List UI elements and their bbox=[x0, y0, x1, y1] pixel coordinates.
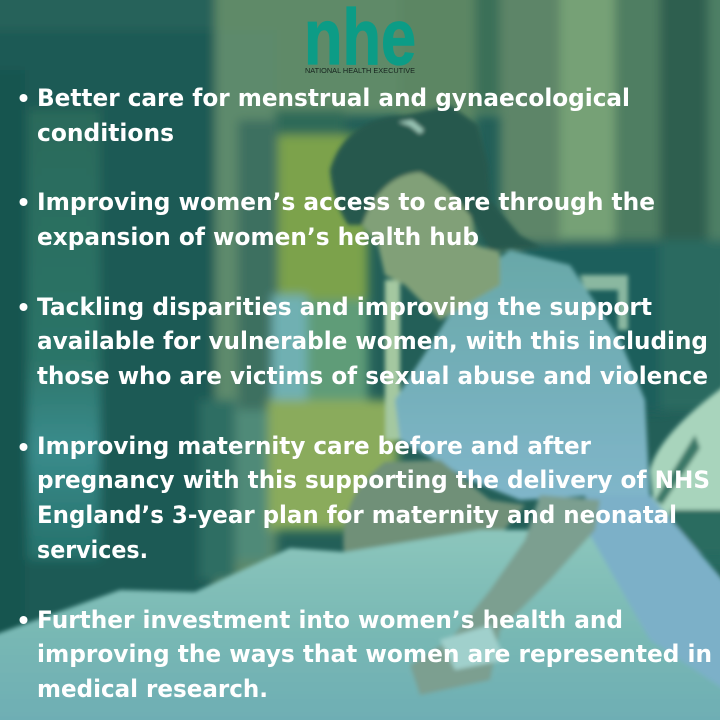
bullet 1: conditions bbox=[37, 119, 174, 147]
bullet 4: England’s 3-year plan for maternity and neonatal bbox=[37, 501, 677, 529]
bullet 3: available for vulnerable women, with this including bbox=[37, 327, 708, 355]
bed sheets bbox=[0, 530, 720, 720]
bullet 4: services. bbox=[37, 536, 148, 564]
bullet 2: expansion of women’s health hub bbox=[37, 223, 479, 251]
logo: National Health Executive bbox=[304, 0, 416, 81]
logo tagline: NATIONAL HEALTH EXECUTIVE bbox=[305, 66, 415, 75]
bullet 4 bbox=[20, 432, 710, 564]
light window frame behind woman bbox=[580, 275, 628, 330]
bullet 3 bbox=[20, 293, 708, 390]
woman's belly bbox=[343, 460, 525, 560]
gown drape over bed bbox=[585, 495, 720, 700]
woman's hair bbox=[330, 105, 542, 250]
woman's face and neck bbox=[362, 170, 500, 320]
woman's forearm and hand bbox=[410, 495, 600, 695]
bullet 5 bbox=[20, 606, 712, 703]
bullet 3: Tackling disparities and improving the support bbox=[37, 293, 652, 321]
bullet 4: pregnancy with this supporting the delivery of NHS bbox=[37, 466, 710, 494]
bullet 5: improving the ways that women are represented in bbox=[37, 640, 712, 668]
bullet 1 bbox=[20, 84, 630, 147]
bed rail bbox=[650, 375, 720, 560]
bullet 2 bbox=[20, 188, 655, 251]
hand bandage bbox=[440, 625, 505, 670]
woman's gown bbox=[395, 250, 650, 500]
bullet 2: Improving women’s access to care through the bbox=[37, 188, 655, 216]
hair tie bbox=[398, 120, 424, 134]
bullet 3: those who are victims of sexual abuse and violence bbox=[37, 362, 708, 390]
bullet 1: Better care for menstrual and gynaecological bbox=[37, 84, 630, 112]
bullet 5: medical research. bbox=[37, 675, 268, 703]
bullet 4: Improving maternity care before and after bbox=[37, 432, 591, 460]
bullet 5: Further investment into women’s health and bbox=[37, 606, 623, 634]
